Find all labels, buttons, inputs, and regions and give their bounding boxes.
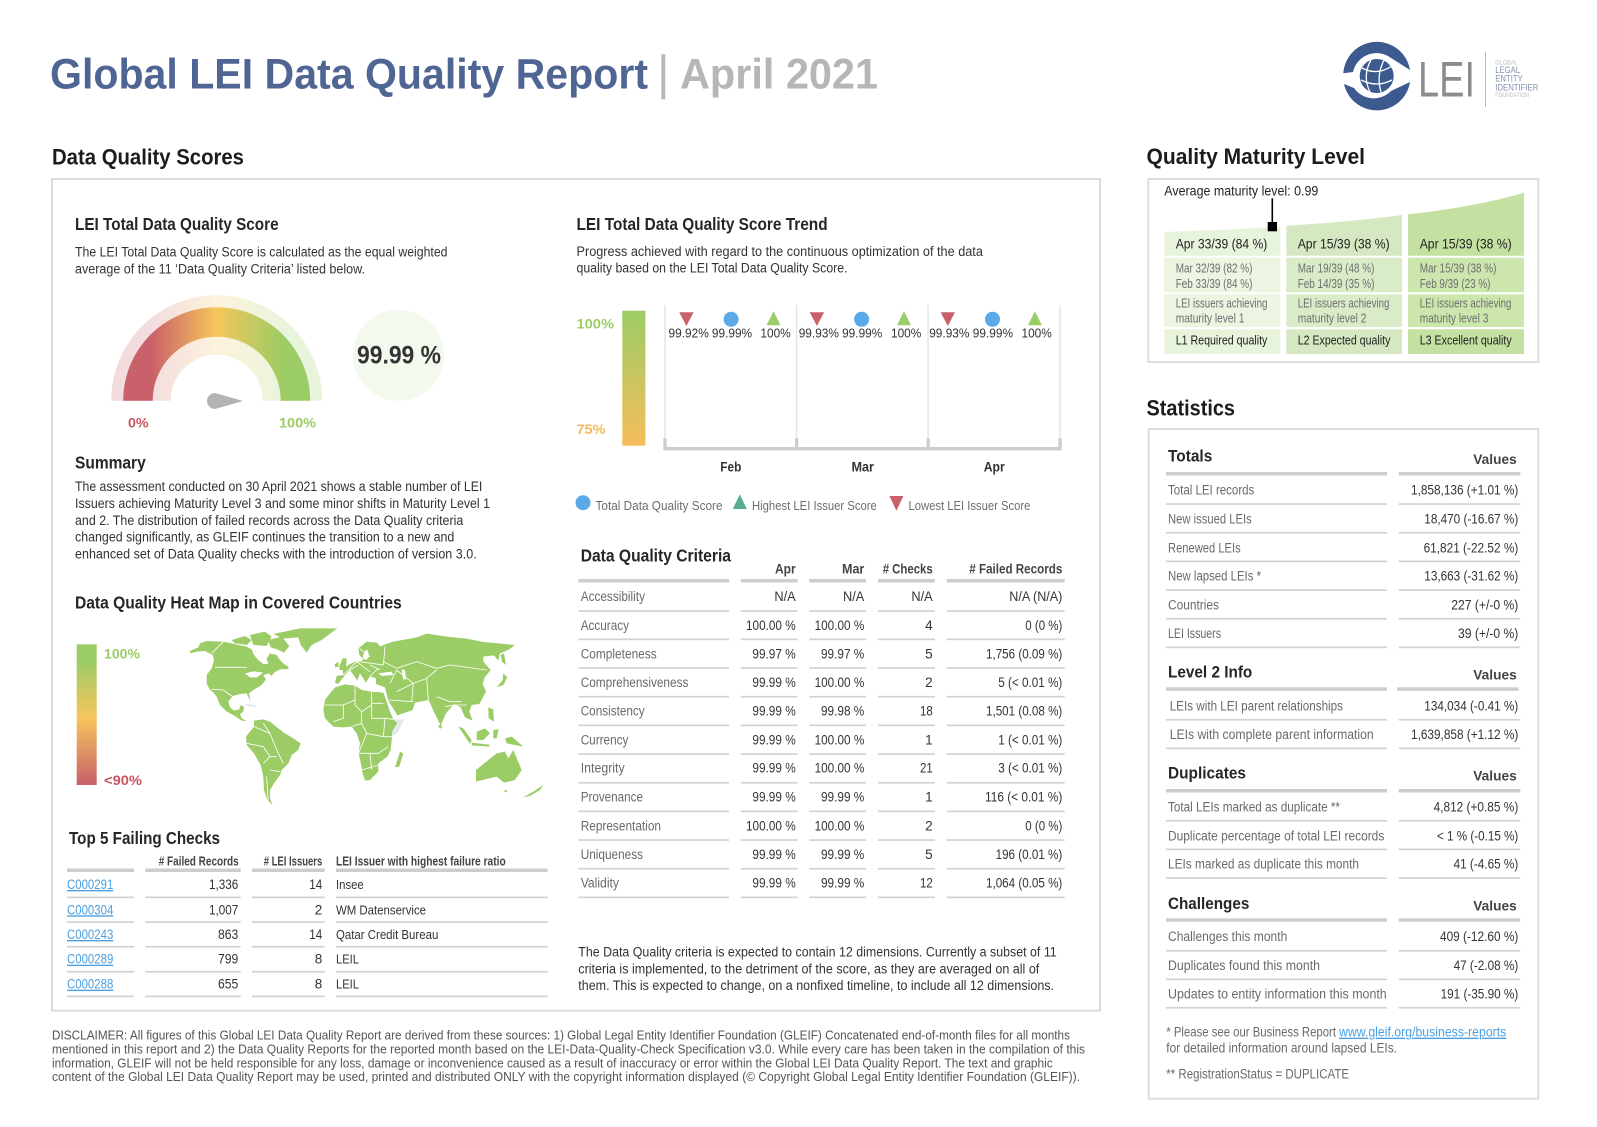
legend: heat map scale: 100%	[104, 646, 141, 662]
gauge chart: 100%	[279, 415, 317, 431]
table: data quality criteria: Validity	[581, 875, 619, 890]
table: duplicates	[1166, 764, 1520, 879]
text block: trend description: quality based on the LEI Total Data Quality Score.	[576, 261, 848, 276]
legend bar: 75% to 100%	[576, 311, 645, 446]
table: top 5 failing checks: C000288	[67, 977, 113, 992]
series: Feb: Feb	[720, 460, 741, 475]
disclaimer: DISCLAIMER: All figures of this Global LEI Data Quality Report are derived from these sources: 1) Global Legal Entity Identifier Foundation (GLEIF) Concatenated end-of-month files for all months	[52, 1028, 1070, 1042]
legend bar: 75% to 100%: 100%	[576, 316, 615, 332]
table: data quality criteria: 116 (< 0.01 %)	[985, 789, 1062, 804]
table: totals: Total LEI records	[1168, 483, 1255, 498]
table: level 2 info: Values	[1473, 667, 1517, 682]
table: duplicates: < 1 % (-0.15 %)	[1437, 828, 1518, 843]
table: top 5 failing checks: C000243	[67, 927, 113, 942]
table: top 5 failing checks: Insee	[336, 878, 364, 892]
table: data quality criteria: Completeness	[581, 647, 657, 662]
table: duplicates: Total LEIs marked as duplicate **	[1168, 799, 1341, 814]
gauge chart: 0%	[128, 415, 149, 431]
table: duplicates: 41 (-4.65 %)	[1454, 857, 1518, 872]
table: data quality criteria: Accuracy	[581, 618, 629, 633]
icon: LEI logo	[1343, 42, 1539, 110]
table: data quality criteria: N/A	[843, 589, 864, 604]
table: data quality criteria: 99.99 %	[752, 732, 796, 747]
heading: Top 5 Failing Checks: Top 5 Failing Checks	[69, 828, 220, 848]
series: Apr: 100%	[1022, 327, 1052, 341]
column: level 1	[1164, 227, 1280, 354]
series: Mar: 99.93%	[799, 327, 839, 341]
text block: criteria note: them. This is expected to change, on a nonfixed timeline, to include all 12 dimensions.	[578, 978, 1054, 993]
text block: summary: Issuers achieving Maturity Level 3 and some minor shifts in Maturity Level 1	[75, 496, 490, 511]
column: level 3: maturity level 3	[1420, 312, 1488, 326]
table: top 5 failing checks: 655	[218, 977, 238, 992]
heading: Data Quality Criteria: Data Quality Criteria	[581, 546, 731, 566]
table: top 5 failing checks: Qatar Credit Bureau	[336, 928, 438, 942]
column: level 3: Mar 15/39 (38 %)	[1420, 261, 1496, 275]
title: April 2021	[680, 50, 878, 98]
series: Apr: 99.99%	[973, 327, 1013, 341]
table: data quality criteria: 100.00 %	[815, 618, 864, 633]
marker: average level pointer	[1268, 198, 1277, 231]
icon: LEI logo: LEI	[1418, 52, 1475, 108]
table: challenges: Challenges	[1168, 894, 1249, 913]
heading: LEI Total Data Quality Score: LEI Total Data Quality Score	[75, 214, 279, 234]
heading: Quality Maturity Level: Quality Maturity Level	[1146, 144, 1365, 169]
table: data quality criteria: 100.00 %	[746, 818, 796, 833]
series: Feb	[668, 311, 791, 475]
table: challenges: 191 (-35.90 %)	[1441, 987, 1518, 1002]
table: totals: Countries	[1168, 597, 1219, 612]
title: Global LEI Data Quality Report	[50, 50, 648, 98]
icon: LEI logo: GLOBAL	[1495, 60, 1519, 66]
text block: footnotes: for detailed information around lapsed LEIs.	[1166, 1041, 1397, 1056]
column: level 2	[1286, 215, 1402, 354]
table: level 2 info	[1166, 662, 1520, 749]
table: top 5 failing checks: 1,007	[209, 902, 238, 917]
table: data quality criteria: 3 (< 0.01 %)	[998, 761, 1062, 776]
table: data quality criteria: Mar	[842, 561, 865, 576]
series: Feb: 100%	[760, 327, 791, 341]
table: data quality criteria: Integrity	[581, 761, 625, 776]
table: data quality criteria: # Checks	[883, 561, 933, 576]
text block: criteria note	[578, 945, 1057, 993]
table: data quality criteria: Accessibility	[581, 589, 645, 604]
text block: criteria note: criteria is implemented, to the detriment of the score, as they are averaged on all of	[578, 961, 1040, 976]
text block: criteria note: The Data Quality criteria is expected to contain 12 dimensions. Currently a subset of 11	[578, 945, 1057, 960]
label: average maturity level: Average maturity level: 0.99	[1164, 183, 1318, 198]
text block: score description: The LEI Total Data Quality Score is calculated as the equal weighted	[75, 245, 448, 260]
column: level 2: LEI issuers achieving	[1298, 297, 1389, 311]
table: top 5 failing checks: LEI Issuer with highest failure ratio	[336, 855, 506, 869]
table: data quality criteria: 100.00 %	[815, 761, 864, 776]
table: data quality criteria: Consistency	[581, 704, 645, 719]
column: level 2: Feb 14/39 (35 %)	[1298, 277, 1374, 291]
panel: quality maturity level	[1148, 179, 1538, 362]
column: level 1: L1 Required quality	[1176, 333, 1268, 347]
table: top 5 failing checks	[67, 855, 548, 997]
table: data quality criteria: 99.99 %	[821, 789, 864, 804]
table: level 2 info: LEIs with complete parent information	[1170, 727, 1374, 742]
table: top 5 failing checks: 2	[315, 902, 322, 917]
table: data quality criteria: Provenance	[581, 789, 643, 804]
table: challenges: 47 (-2.08 %)	[1454, 958, 1518, 973]
column: level 3: Feb 9/39 (23 %)	[1420, 277, 1490, 291]
text block: summary: enhanced set of Data Quality checks with the introduction of version 3.0.	[75, 547, 477, 562]
table: level 2 info: Level 2 Info	[1168, 662, 1252, 681]
table: data quality criteria: 18	[920, 704, 933, 719]
series: Mar: Mar	[851, 460, 875, 475]
table: totals: 61,821 (-22.52 %)	[1424, 540, 1518, 555]
table: data quality criteria: 1,501 (0.08 %)	[986, 704, 1062, 719]
table: top 5 failing checks: 1,336	[209, 877, 238, 892]
table: top 5 failing checks: 14	[309, 927, 323, 942]
table: data quality criteria: 99.99 %	[752, 875, 796, 890]
table: data quality criteria: 100.00 %	[815, 818, 864, 833]
table: data quality criteria: 99.99 %	[752, 675, 796, 690]
table: duplicates: Duplicates	[1168, 764, 1246, 783]
text block: footnotes: ** RegistrationStatus = DUPLICATE	[1166, 1067, 1349, 1082]
table: data quality criteria: N/A	[774, 589, 796, 604]
table: challenges: Values	[1473, 899, 1517, 914]
table: totals: 18,470 (-16.67 %)	[1424, 511, 1518, 526]
legend bar: 75% to 100%: 75%	[576, 421, 606, 437]
table: data quality criteria: Uniqueness	[581, 847, 643, 862]
text block: trend description	[576, 244, 983, 276]
text block: summary: The assessment conducted on 30 April 2021 shows a stable number of LEI	[75, 479, 482, 494]
table: top 5 failing checks: LEIL	[336, 978, 359, 992]
table: level 2 info: LEIs with LEI parent relationships	[1170, 699, 1343, 714]
table: challenges: Updates to entity information this month	[1168, 987, 1387, 1002]
column: level 2: maturity level 2	[1298, 312, 1366, 326]
table: top 5 failing checks: 863	[218, 927, 238, 942]
table: data quality criteria: 1 (< 0.01 %)	[998, 732, 1062, 747]
text block: summary: changed significantly, as GLEIF continues the transition to a new and	[75, 530, 454, 545]
series: Apr: 99.93%	[929, 327, 970, 341]
legend: trend markers: Highest LEI Issuer Score	[752, 499, 877, 513]
table: totals: Renewed LEIs	[1168, 540, 1241, 555]
table: totals: 39 (+/-0 %)	[1458, 626, 1518, 641]
heading: Summary: Summary	[75, 452, 146, 472]
table: duplicates: Values	[1473, 769, 1517, 784]
icon: LEI logo: FOUNDATION	[1495, 93, 1529, 99]
table: duplicates: 4,812 (+0.85 %)	[1434, 799, 1518, 814]
table: data quality criteria: 1	[925, 789, 933, 804]
table: data quality criteria: 5	[925, 647, 933, 662]
table: data quality criteria: Representation	[581, 818, 661, 833]
column: level 1: Mar 32/39 (82 %)	[1176, 261, 1252, 275]
table: data quality criteria: 1,064 (0.05 %)	[986, 875, 1062, 890]
table: data quality criteria: 99.99 %	[752, 847, 796, 862]
text block: footnotes: www.gleif.org/business-reports	[1338, 1025, 1507, 1040]
table: data quality criteria: 5 (< 0.01 %)	[998, 675, 1062, 690]
table: data quality criteria: 99.97 %	[821, 647, 864, 662]
series: Mar	[799, 311, 921, 475]
disclaimer: mentioned in this report and 2) the Data Quality Reports for the reported month based on the LEI-Data-Quality-Check Specification v3.0. While every care has been taken in the compilation of this	[52, 1042, 1085, 1056]
column: level 2: Mar 19/39 (48 %)	[1298, 261, 1374, 275]
disclaimer: information, GLEIF will not be held responsible for any loss, damage or inconvenience caused as a result of inaccuracy or error within the Global LEI Data Quality Report. The text and graphic	[52, 1056, 1053, 1070]
series: Mar: 99.99%	[842, 327, 882, 341]
text block: footnotes: * Please see our Business Report	[1166, 1025, 1336, 1040]
table: level 2 info: 1,639,858 (+1.12 %)	[1411, 727, 1518, 742]
table: data quality criteria: Comprehensiveness	[581, 675, 689, 690]
column: level 1: Apr 33/39 (84 %)	[1176, 235, 1267, 251]
table: challenges: 409 (-12.60 %)	[1440, 929, 1518, 944]
table: top 5 failing checks: WM Datenservice	[336, 903, 426, 917]
table: data quality criteria: # Failed Records	[969, 561, 1062, 576]
heading: Statistics: Statistics	[1146, 396, 1235, 421]
column: level 2: L2 Expected quality	[1298, 333, 1391, 347]
disclaimer: content of the Global LEI Data Quality Report may be used, printed and distributed ONLY with the copyright information displayed (© Copyright Global Legal Entity Identifier Foundation (GLEIF)).	[52, 1070, 1080, 1084]
icon: LEI logo: LEGAL	[1495, 65, 1520, 75]
heading: score trend: LEI Total Data Quality Score Trend	[576, 214, 828, 234]
series: Mar: 100%	[891, 327, 921, 341]
table: data quality criteria: Currency	[581, 732, 629, 747]
table: challenges	[1166, 894, 1520, 1009]
table: data quality criteria: 100.00 %	[815, 675, 864, 690]
legend: trend markers	[576, 494, 1030, 513]
table: top 5 failing checks: # Failed Records	[159, 855, 239, 869]
legend: trend markers: Lowest LEI Issuer Score	[908, 499, 1030, 513]
table: data quality criteria: 5	[925, 847, 933, 862]
text block: trend description: Progress achieved with regard to the continuous optimization of the data	[576, 244, 983, 259]
series: Apr: Apr	[984, 460, 1005, 475]
column: level 3: L3 Excellent quality	[1420, 333, 1512, 347]
table: data quality criteria: 99.99 %	[752, 761, 796, 776]
column: level 1: LEI issuers achieving	[1176, 297, 1267, 311]
table: totals: New lapsed LEIs *	[1168, 569, 1262, 584]
text block: footnotes	[1166, 1025, 1507, 1082]
gauge chart	[111, 295, 322, 431]
table: data quality criteria: N/A	[911, 589, 933, 604]
series: Apr	[929, 311, 1052, 475]
table: data quality criteria: 12	[920, 875, 933, 890]
table: totals: 227 (+/-0 %)	[1451, 597, 1518, 612]
table: top 5 failing checks: C000304	[67, 902, 114, 917]
table: top 5 failing checks: 8	[315, 952, 322, 967]
table: totals: Totals	[1168, 447, 1212, 466]
table: data quality criteria: 99.97 %	[752, 647, 796, 662]
table: data quality criteria: 99.99 %	[821, 847, 864, 862]
table: challenges: Challenges this month	[1168, 929, 1287, 944]
legend: heat map scale: <90%	[104, 772, 143, 788]
table: totals: 1,858,136 (+1.01 %)	[1411, 483, 1518, 498]
table: data quality criteria: 99.99 %	[752, 704, 796, 719]
column: level 1: Feb 33/39 (84 %)	[1176, 277, 1252, 291]
table: data quality criteria: N/A (N/A)	[1009, 589, 1062, 604]
table: data quality criteria: 2	[925, 675, 933, 690]
table: data quality criteria: 196 (0.01 %)	[996, 847, 1062, 862]
table: data quality criteria: Apr	[775, 561, 796, 576]
table: data quality criteria: 0 (0 %)	[1025, 818, 1062, 833]
table: top 5 failing checks: 8	[315, 977, 322, 992]
table: data quality criteria: 99.98 %	[821, 704, 864, 719]
table: duplicates: LEIs marked as duplicate this month	[1168, 857, 1359, 872]
table: data quality criteria: 99.99 %	[752, 789, 796, 804]
heading: heat map: Data Quality Heat Map in Covered Countries	[75, 592, 402, 612]
panel: statistics	[1149, 429, 1538, 1099]
table: data quality criteria: 2	[925, 818, 933, 833]
table: data quality criteria: 1	[925, 732, 933, 747]
legend: trend markers: Total Data Quality Score	[596, 499, 723, 513]
chart: score trend	[576, 305, 1062, 513]
score callout: 99.99 %	[353, 310, 444, 401]
table: totals: New issued LEIs	[1168, 511, 1252, 526]
table: totals	[1166, 447, 1520, 648]
column: level 3: Apr 15/39 (38 %)	[1420, 235, 1512, 251]
icon: LEI logo: IDENTIFIER	[1495, 82, 1539, 92]
table: top 5 failing checks: 14	[309, 877, 323, 892]
table: top 5 failing checks: C000289	[67, 952, 113, 967]
panel: data quality scores	[52, 179, 1100, 1011]
table: challenges: Duplicates found this month	[1168, 958, 1320, 973]
score callout: 99.99 %: 99.99 %	[357, 341, 441, 369]
table: data quality criteria: 0 (0 %)	[1025, 618, 1062, 633]
column: level 3	[1408, 193, 1524, 354]
text block: summary: and 2. The distribution of failed records across the Data Quality criteria	[75, 513, 464, 528]
table: totals: Values	[1473, 452, 1517, 467]
table: data quality criteria: 100.00 %	[815, 732, 864, 747]
table: data quality criteria	[578, 561, 1065, 898]
text block: score description: average of the 11 ‘Data Quality Criteria’ listed below.	[75, 261, 365, 276]
column: level 1: maturity level 1	[1176, 312, 1244, 326]
world map	[190, 628, 543, 805]
table: data quality criteria: 99.99 %	[821, 875, 864, 890]
table: data quality criteria: 4	[925, 618, 933, 633]
column: level 2: Apr 15/39 (38 %)	[1298, 235, 1390, 251]
column: level 3: LEI issuers achieving	[1420, 297, 1511, 311]
icon: LEI logo: ENTITY	[1495, 74, 1523, 84]
table: top 5 failing checks: # LEI Issuers	[264, 855, 322, 869]
text block: score description	[75, 245, 448, 276]
table: level 2 info: 134,034 (-0.41 %)	[1424, 699, 1518, 714]
table: data quality criteria: 21	[920, 761, 933, 776]
table: top 5 failing checks: LEIL	[336, 953, 359, 967]
table: top 5 failing checks: C000291	[67, 877, 113, 892]
legend: heat map scale	[77, 644, 143, 788]
table: totals: LEI Issuers	[1168, 626, 1221, 641]
table: data quality criteria: 100.00 %	[746, 618, 796, 633]
text block: summary	[75, 479, 490, 562]
table: data quality criteria: 1,756 (0.09 %)	[986, 647, 1062, 662]
disclaimer	[52, 1028, 1085, 1084]
heading: Data Quality Scores: Data Quality Scores	[52, 144, 244, 169]
series: Feb: 99.99%	[712, 327, 752, 341]
table: duplicates: Duplicate percentage of total LEI records	[1168, 828, 1385, 843]
table: top 5 failing checks: 799	[218, 952, 238, 967]
series: Feb: 99.92%	[668, 327, 709, 341]
table: totals: 13,663 (-31.62 %)	[1424, 569, 1518, 584]
